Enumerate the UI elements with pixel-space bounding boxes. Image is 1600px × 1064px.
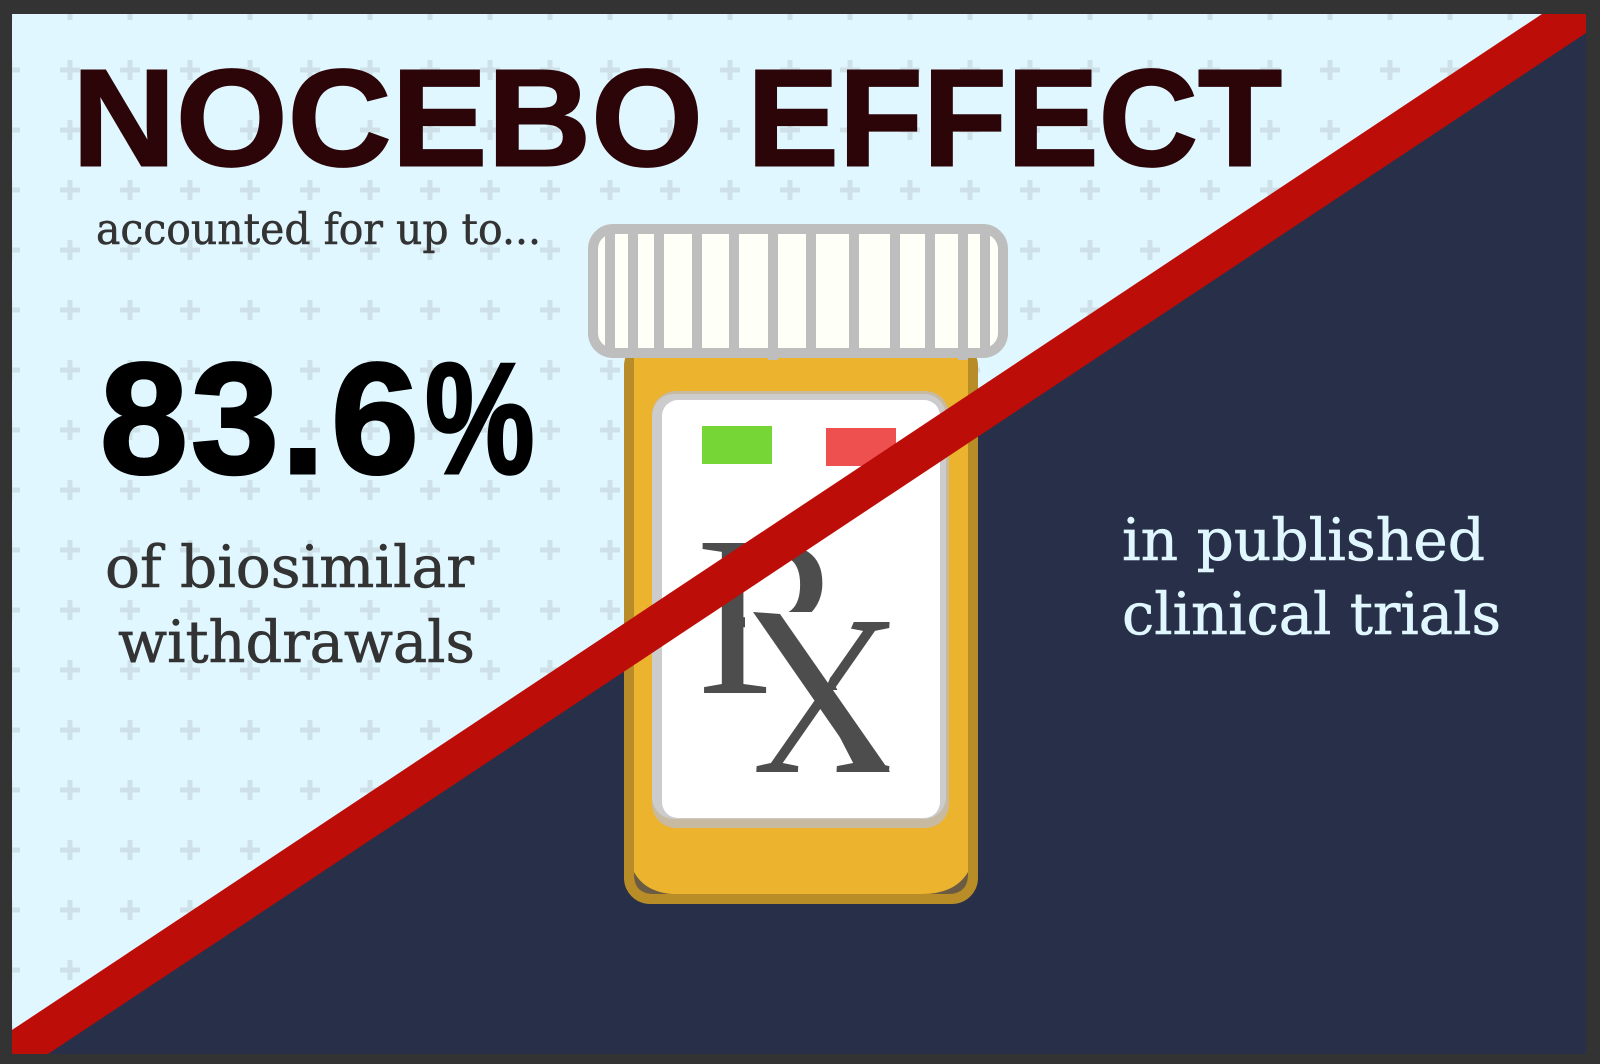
- text: of biosimilar withdrawals: of biosimilar: [105, 533, 474, 601]
- statistic: 83.6%: %: [425, 331, 535, 508]
- statistic: 83.6%: 83.6: [100, 331, 419, 507]
- title: NOCEBO: [72, 42, 703, 196]
- title: [72, 42, 1282, 196]
- Rx symbol: R: [696, 489, 849, 743]
- green tab: [702, 426, 772, 464]
- text: of biosimilar withdrawals: [105, 533, 475, 676]
- bottle body: [624, 340, 978, 904]
- Rx symbol: [702, 543, 890, 772]
- prescription label: [652, 391, 949, 828]
- text: in published clinical trials: clinical trials: [1122, 580, 1501, 648]
- red tab: [826, 428, 896, 466]
- Rx symbol: X: [749, 569, 905, 823]
- bottle cap: [593, 226, 1003, 360]
- subtitle: accounted for up to: accounted for up to...: [96, 205, 541, 255]
- text: of biosimilar withdrawals: withdrawals: [118, 608, 475, 676]
- text: in published clinical trials: in published: [1122, 506, 1485, 574]
- icon: pill bottle: [593, 226, 1003, 904]
- title: EFFECT: [747, 42, 1282, 196]
- text: in published clinical trials: [1122, 506, 1501, 648]
